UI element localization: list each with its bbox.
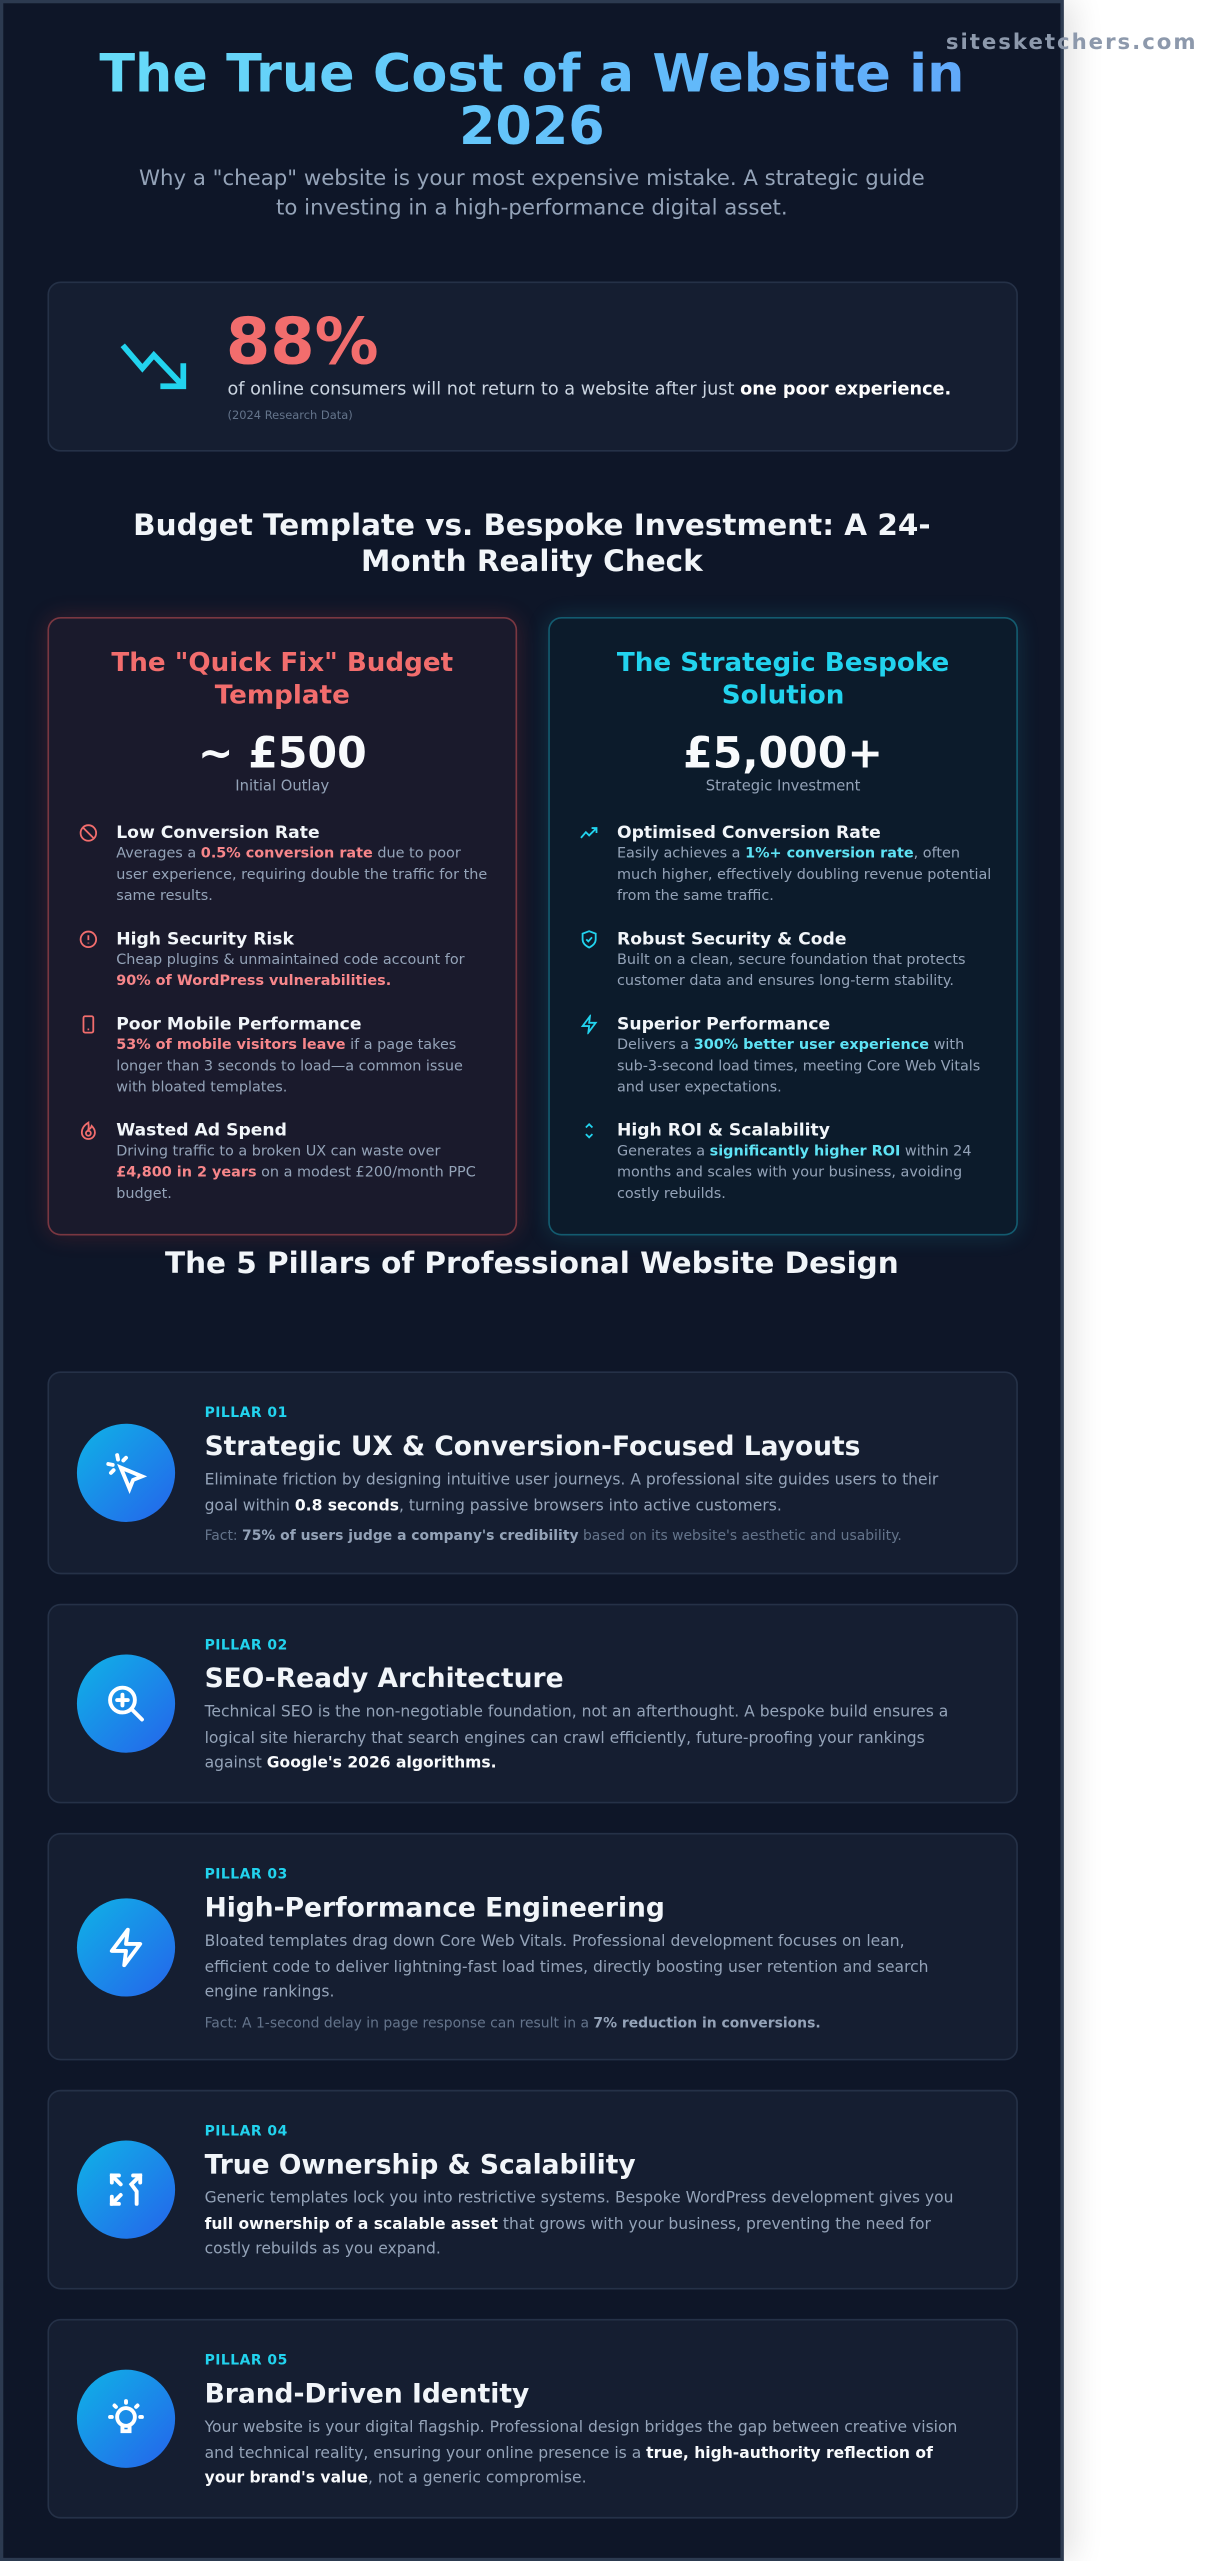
stat source: (2024 Research Data) (227, 409, 353, 422)
item: conversion (580, 823, 991, 905)
item: low conversion: Low Conversion Rate (116, 823, 320, 843)
price label: Initial Outlay (235, 779, 329, 795)
stat text: of online consumers will not return to a website after just one poor experience. (227, 378, 951, 399)
text (204, 2353, 957, 2487)
icon: bolt (77, 1898, 175, 1997)
item: ROI: High ROI & Scalability (617, 1121, 830, 1141)
heading: The "Quick Fix" Budget Template (111, 646, 453, 710)
item: security risk: Cheap plugins & unmaintained code account for 90% of WordPress vulnerabilities. (116, 952, 465, 990)
text: PILLAR 05 (205, 2353, 288, 2370)
icon: search plus (77, 1655, 175, 1753)
text: True Ownership & Scalability (205, 2149, 636, 2180)
text: PILLAR 03 (205, 1867, 288, 1884)
item: mobile: 53% of mobile visitors leave if a page takes longer than 3 seconds to load—a common issue with bloated templates. (116, 1038, 463, 1096)
text (205, 1406, 938, 1545)
title: The True Cost of a Website in 2026 (99, 43, 964, 157)
text: Strategic UX & Conversion-Focused Layouts (205, 1430, 860, 1461)
text: PILLAR 04 (205, 2124, 288, 2141)
panel: 88% stat card (47, 281, 1018, 452)
text: PILLAR 02 (205, 1638, 288, 1655)
heading: pillars: The 5 Pillars of Professional Website Design (165, 1247, 899, 1281)
stat number: 88% (226, 306, 379, 380)
item: mobile (82, 1015, 463, 1096)
panel: budget template (47, 617, 517, 1236)
text: SEO-Ready Architecture (205, 1663, 564, 1694)
item: ROI: Generates a significantly higher ROI within 24 months and scales with your business, avoiding costly rebuilds. (617, 1144, 972, 1203)
item: wasted ad spend: Wasted Ad Spend (116, 1121, 287, 1141)
icon: cursor click (77, 1424, 175, 1522)
panel: pillar 03 (47, 1833, 1018, 2060)
watermark: sitesketchers.com (946, 31, 1198, 56)
price: ~ £500 (198, 730, 367, 779)
item: low conversion (80, 823, 487, 905)
item: wasted ad spend (80, 1121, 476, 1203)
panel: bespoke solution (548, 617, 1018, 1236)
item: low conversion: Averages a 0.5% conversion rate due to poor user experience, requiring double the traffic for the same results. (116, 846, 487, 905)
item: wasted ad spend: Driving traffic to a broken UX can waste over £4,800 in 2 years on a modest £200/month PPC budget. (116, 1144, 476, 1203)
item: security risk: High Security Risk (116, 930, 294, 949)
text: Technical SEO is the non-negotiable foundation, not an afterthought. A bespoke build ensures a logical site hierarchy that search engines can crawl efficiently, future-proofing your rankings against Google's 2026 algorithms. (205, 1704, 948, 1772)
item: performance (580, 1014, 980, 1096)
heading: comparison: Budget Template vs. Bespoke Investment: A 24-Month Reality Check (133, 509, 931, 579)
text: Fact: A 1-second delay in page response can result in a 7% reduction in conversions. (205, 2015, 821, 2032)
subtitle: Why a "cheap" website is your most expensive mistake. A strategic guide to investing in a high-performance digital asset. (139, 167, 925, 221)
item: performance: Delivers a 300% better user experience with sub-3-second load times, meeting Core Web Vitals and user expectations. (617, 1038, 980, 1096)
text: Brand-Driven Identity (205, 2378, 529, 2409)
text: High-Performance Engineering (205, 1892, 665, 1923)
price label: Strategic Investment (706, 779, 860, 795)
item: conversion: Easily achieves a 1%+ conversion rate, often much higher, effectively doubling revenue potential from the same traffic. (617, 846, 991, 905)
text: Eliminate friction by designing intuitive user journeys. A professional site guides users to their goal within 0.8 seconds, turning passive browsers into active customers. (205, 1471, 938, 1515)
panel: pillar 05 (47, 2319, 1018, 2519)
text (204, 1638, 948, 1772)
item: ROI (585, 1121, 972, 1203)
panel: pillar 04 (47, 2090, 1018, 2289)
text: Fact: 75% of users judge a company's credibility based on its website's aesthetic and usability. (205, 1528, 902, 1545)
item: security (582, 930, 966, 990)
text (205, 1867, 929, 2032)
text: Your website is your digital flagship. Professional design bridges the gap between creative vision and technical reality, ensuring your online presence is a true, high-authority reflection of your brand's value, not a generic compromise. (205, 2419, 957, 2487)
icon: trending down (120, 344, 186, 390)
text: Generic templates lock you into restrictive systems. Bespoke WordPress development gives you full ownership of a scalable asset that grows with your business, preventing the need for costly rebuilds as you expand. (205, 2190, 954, 2258)
item: security: Robust Security & Code (617, 930, 847, 949)
item: mobile: Poor Mobile Performance (116, 1015, 362, 1034)
heading: The Strategic Bespoke Solution (617, 646, 949, 710)
item: performance: Superior Performance (617, 1015, 830, 1034)
item: security risk (80, 930, 465, 990)
panel: pillar 02 (47, 1604, 1018, 1803)
item: security: Built on a clean, secure foundation that protects customer data and ensures long-term stability. (617, 952, 966, 990)
icon: expand arrows (77, 2141, 175, 2239)
price: £5,000+ (683, 730, 883, 779)
text: Bloated templates drag down Core Web Vitals. Professional development focuses on lean, efficient code to deliver lightning-fast load times, directly boosting user retention and search engine rankings. (205, 1933, 929, 2001)
panel: pillar 01 (47, 1371, 1018, 1574)
text: PILLAR 01 (205, 1406, 288, 1422)
item: conversion: Optimised Conversion Rate (617, 823, 881, 843)
icon: lightbulb (77, 2370, 175, 2468)
text (204, 2124, 954, 2258)
